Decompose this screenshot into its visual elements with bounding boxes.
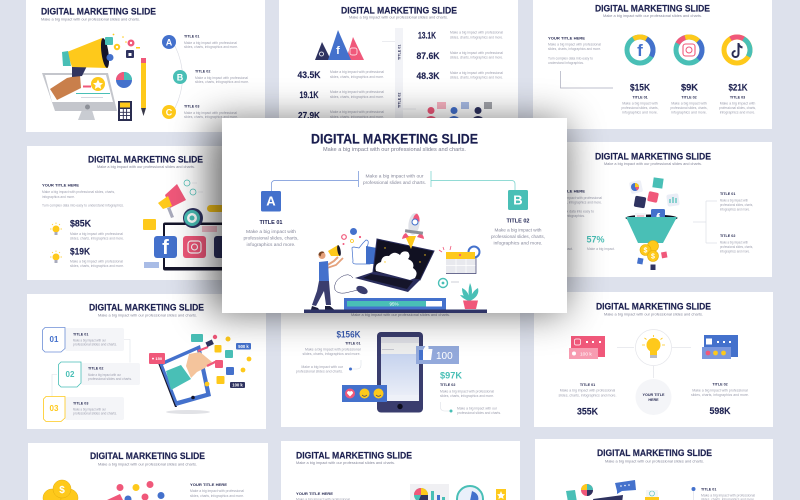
icon: floating social icons [105, 34, 140, 61]
icon: light bulb [50, 250, 62, 263]
text: title 02: professional slides, charts, [720, 245, 753, 249]
callout: left note [296, 360, 361, 374]
subheading: Make a big impact with our professional slides and charts. [351, 313, 450, 317]
statistic: $21K: $21K [728, 82, 748, 92]
statistic: 27.9K: 27.9K [298, 110, 320, 120]
statistic: $156K: TITLE 01 [345, 342, 360, 346]
statistic: 13.1K [418, 30, 503, 40]
badge B with title 02: B [513, 192, 523, 208]
icon: instagram social card [569, 336, 605, 359]
text block: Make a big impact with professional slides, charts, [42, 190, 115, 194]
donut: facebook: f [637, 41, 643, 60]
badge B with title 02: Make a big impact with [494, 228, 542, 232]
subheading: Make a big impact with our professional slides and charts. [349, 16, 448, 20]
badge A with title 01: professional slides, charts, [244, 236, 298, 240]
text block: understand infographics. [548, 214, 585, 218]
illustration: funnel with social icons and coins [626, 177, 680, 270]
text block: Turn complex data into easy to understand infographics. [42, 204, 124, 208]
statistic: $19K: Make a big impact with professional [70, 260, 123, 264]
statistic: 19.1K: Make a big impact with professional [330, 90, 384, 94]
heading: DIGITAL MARKETING SLIDE [90, 451, 205, 462]
list connector arc [175, 46, 182, 108]
statistic: $9K: infographics and more. [671, 110, 707, 114]
text block: infographics and more. [42, 195, 75, 199]
statistic: 48.3K: 48.3K [416, 71, 440, 81]
callout: right note [440, 402, 501, 415]
statistic: $15K: infographics and more. [622, 110, 658, 114]
list item B: TITLE 02 [195, 70, 210, 74]
statistic: 57% [545, 234, 615, 251]
statistic: 598K: Make a big impact with professional [692, 388, 748, 392]
list item A: TITLE 01 [184, 34, 199, 38]
statistic: 13.1K: slides, charts, infographics and more. [450, 36, 503, 40]
callout: like count: 100 [436, 351, 453, 362]
list item C: Make a big impact with professional [184, 111, 237, 115]
list item B [173, 70, 249, 84]
statistic: $97K: Make a big impact with professional [440, 390, 494, 394]
slide: marketing funnel [533, 142, 772, 277]
illustration: laptop and chat icons [566, 480, 659, 500]
statistic: $21K: Make a big impact with [720, 102, 755, 106]
heading: DIGITAL MARKETING SLIDE [296, 450, 412, 462]
icon: social triangles: f [336, 45, 340, 57]
icon: people with chat bubbles [425, 102, 492, 122]
text block [42, 184, 124, 208]
subheading: Make a big impact with our professional slides and charts. [323, 147, 466, 153]
connector: teal [431, 171, 515, 190]
statistic: $21K: infographics and more. [720, 110, 755, 114]
text: title 01: infographics and more. [720, 208, 750, 212]
statistic: $85K: Make a big impact with professional [70, 232, 123, 236]
text: title 02: Make a big impact with [720, 240, 748, 244]
slide: charts and globe [281, 441, 520, 500]
text block: slides, charts, infographics and more. [548, 200, 602, 204]
list item B: B [177, 72, 184, 82]
heading: DIGITAL MARKETING SLIDE [311, 132, 478, 146]
statistic: $97K: $97K [440, 370, 462, 382]
text block: YOUR TITLE HERE [548, 190, 586, 194]
callout: left note: Make a big impact with our [301, 365, 344, 369]
text: title 01 [720, 192, 753, 212]
list item 03: professional slides and charts. [73, 412, 117, 416]
heading: DIGITAL MARKETING SLIDE [341, 6, 457, 16]
list item C [162, 104, 238, 119]
center title circle: YOUR TITLE [643, 393, 665, 397]
subheading: Make a big impact with our professional slides and charts. [98, 314, 197, 318]
icon: coins: $ [59, 485, 65, 496]
list item C: slides, charts, infographics and more. [184, 115, 238, 119]
list item 02: professional slides and charts. [88, 377, 132, 381]
statistic: $21K: professional slides, charts, [719, 106, 756, 110]
statistic: $97K [440, 370, 494, 398]
icon: instagram social card: 100 k [580, 352, 592, 358]
callout: reactions [342, 385, 387, 402]
icon: social triangles [315, 30, 364, 60]
list item 01: TITLE 01 [73, 332, 88, 336]
statistic: 48.3K: Make a big impact with professional [450, 71, 503, 75]
list item 03: Make a big impact with our [73, 408, 107, 412]
heading: DIGITAL MARKETING SLIDE [88, 154, 203, 166]
illustration: progress bar [344, 298, 446, 310]
illustration: funnel with social icons and coins: $ [644, 248, 648, 254]
vertical title band: TITLE 02 [398, 93, 402, 108]
list item A: slides, charts, infographics and more. [184, 45, 238, 49]
statistic: 19.1K: 19.1K [300, 90, 319, 100]
icon: megaphone [62, 38, 111, 77]
text block [190, 483, 244, 498]
slide: numbered list with tablet [27, 294, 266, 429]
statistic: $15K: Make a big impact with [622, 102, 658, 106]
illustration: laptop with rocket launch [355, 212, 434, 292]
statistic: 87.6K: 87.6K [416, 51, 440, 61]
text block: slides, charts, infographics and more. [190, 494, 244, 498]
statistic: $15K [622, 82, 659, 114]
badge B with title 02: TITLE 02 [506, 218, 530, 224]
text block: Turn complex data into easy to [548, 56, 593, 60]
slide: laptop with social apps and bulbs [27, 146, 265, 280]
text: title 02: TITLE 02 [720, 234, 735, 238]
illustration: tablet with hand: 100 k [232, 382, 243, 388]
illustration: calendar and gear [439, 246, 480, 274]
subheading: Make a big impact with our professional slides and charts. [605, 460, 704, 464]
heading: DIGITAL MARKETING SLIDE [596, 302, 711, 312]
text block [548, 36, 601, 65]
statistic: 48.3K [416, 71, 503, 81]
statistic: 598K [691, 382, 749, 416]
heading: DIGITAL MARKETING SLIDE [41, 6, 156, 18]
statistic: 57%: Make a big impact. [587, 247, 615, 251]
illustration: funnel with social icons and coins: f [656, 211, 661, 225]
slide: light bulb hub [534, 292, 773, 427]
subheading: Make a big impact with our professional slides and charts. [97, 165, 195, 169]
illustration: ground [304, 310, 487, 313]
statistic: 598K: 598K [710, 406, 731, 416]
icon: smartphone [377, 332, 423, 412]
slide: coins and megaphone [28, 443, 268, 500]
callout: right note: Make a big impact with our [457, 406, 498, 410]
vertical title band [382, 28, 416, 120]
icon: pencil [141, 58, 146, 116]
list item C: TITLE 03 [184, 104, 199, 108]
text block [296, 492, 350, 500]
statistic: $19K: $19K [70, 246, 90, 256]
list item 01 [42, 328, 124, 352]
slide: three donut charts [533, 0, 772, 129]
slide: megaphone with A B C list [26, 0, 265, 132]
list item 02 [58, 362, 140, 387]
list item A: Make a big impact with professional [184, 41, 237, 45]
statistic: $85K [70, 218, 124, 240]
list item C: C [166, 108, 173, 118]
heading: DIGITAL MARKETING SLIDE [597, 448, 712, 459]
badge A with title 01: TITLE 01 [260, 220, 282, 226]
text block: YOUR TITLE HERE [296, 492, 334, 496]
text block: Turn complex data into easy to [548, 210, 594, 214]
badge A with title 01: Make a big impact with [246, 229, 297, 234]
statistic: $15K: professional slides, charts, [622, 106, 659, 110]
list item 03 [44, 396, 124, 422]
statistic: $15K: TITLE 01 [632, 96, 648, 100]
statistic: 355K: Make a big impact with professional [560, 388, 615, 392]
illustration: funnel with social icons and coins: $ [651, 254, 655, 260]
statistic: $19K: slides, charts, infographics and more. [70, 264, 124, 268]
timeline item: title 01: TITLE 01 [701, 488, 716, 492]
vertical title band: TITLE 01 [398, 45, 402, 60]
list item 01: Make a big impact with our [73, 338, 107, 342]
statistic: $9K: professional slides, charts, [670, 106, 708, 110]
illustration: laptop with social icons: f [162, 237, 169, 259]
text block: Make a big impact with professional [190, 489, 244, 493]
statistic: $85K: $85K [70, 218, 91, 228]
statistic: 27.9K: Make a big impact with professional [330, 110, 384, 114]
statistic: 598K: TITLE 02 [712, 382, 728, 386]
list item A: A [166, 38, 173, 48]
illustration: tablet with hand [149, 334, 251, 414]
statistic: $15K: $15K [630, 82, 650, 92]
icon: coins [43, 480, 78, 500]
badge B with title 02 [491, 190, 545, 246]
statistic: $97K: TITLE 02 [440, 383, 455, 387]
statistic: 355K [559, 383, 617, 416]
icon: social hearts and megaphone [107, 481, 164, 500]
icon: calculator [118, 101, 132, 121]
timeline item: title 01 [692, 487, 755, 500]
heading: DIGITAL MARKETING SLIDE [595, 152, 711, 162]
list item 02: TITLE 02 [88, 366, 103, 370]
text: center note: Make a big impact with our [366, 174, 424, 178]
statistic: 43.5K: slides, charts, infographics and more. [330, 75, 384, 79]
badge A with title 01 [244, 191, 298, 247]
subheading: Make a big impact with our professional slides and charts. [98, 462, 197, 466]
statistic: 57%: Make a big impact. [545, 247, 573, 251]
pie chart [116, 72, 132, 88]
statistic: 355K: slides, charts, infographics and more. [559, 394, 617, 398]
icon: computer monitor [42, 73, 117, 120]
text: title 01: Make a big impact with [720, 198, 748, 202]
statistic: 19.1K [300, 90, 384, 100]
badge B with title 02: professional slides, charts, [491, 234, 545, 239]
statistic: 87.6K: slides, charts, infographics and more. [450, 56, 503, 60]
statistic: 27.9K [298, 110, 384, 120]
illustration: tablet with hand: ♥ 150 [152, 356, 163, 361]
badge B with title 02: infographics and more. [494, 240, 542, 246]
text: center note [363, 174, 426, 185]
list item 02: Make a big impact with our [88, 373, 122, 377]
statistic: $156K: $156K [336, 330, 361, 340]
illustration: laptop with social icons [143, 180, 237, 270]
icon: light bulb hub [636, 330, 672, 366]
statistic: 13.1K: 13.1K [418, 30, 436, 40]
heading: DIGITAL MARKETING SLIDE [89, 302, 204, 314]
text: center note: professional slides and charts. [363, 180, 426, 185]
illustration: mouse and cable [335, 275, 369, 296]
donut: tiktok [719, 32, 755, 68]
statistic: 355K: 355K [577, 406, 598, 416]
central slide [222, 118, 567, 313]
subheading: Make a big impact with our professional slides and charts. [41, 18, 140, 22]
bracket connector [693, 201, 717, 243]
statistic: $156K: slides, charts, infographics and more. [303, 352, 361, 356]
text: title 02 [720, 234, 753, 254]
statistic: $21K: TITLE 03 [730, 96, 745, 100]
slide: social triangles and statistics [279, 0, 518, 123]
statistic: $156K [303, 330, 361, 356]
center title circle: HERE [648, 398, 659, 402]
statistic: $9K: TITLE 02 [681, 96, 697, 100]
illustration: progress bar: 95% [389, 302, 399, 307]
illustration: tablet with hand: 500 k [238, 344, 249, 349]
statistic: $85K: slides, charts, infographics and more. [70, 236, 124, 240]
text block: understand infographics. [548, 61, 584, 65]
statistic: 43.5K: 43.5K [298, 70, 321, 80]
list item 01: 01 [50, 335, 59, 344]
callout: right note: professional slides and charts. [457, 411, 501, 415]
subheading: Make a big impact with our professional slides and charts. [604, 162, 702, 166]
donut: instagram [671, 32, 707, 68]
statistic: $97K: slides, charts, infographics and more. [440, 394, 494, 398]
subheading: Make a big impact with our professional slides and charts. [296, 461, 395, 465]
list item A [162, 34, 238, 49]
center title circle [636, 379, 672, 415]
list item 01: professional slides and charts. [73, 342, 117, 346]
statistic: $9K [670, 82, 708, 114]
badge A with title 01: infographics and more. [246, 242, 296, 247]
statistic: 87.6K [416, 51, 503, 61]
list item 02: 02 [66, 370, 75, 379]
text block: Make a big impact with professional [548, 196, 602, 200]
text: title 02: infographics and more. [720, 250, 750, 254]
text block: Make a big impact with professional [548, 42, 601, 46]
icon: thumbs up [352, 240, 377, 264]
subheading: Make a big impact with our professional slides and charts. [604, 312, 703, 316]
icon: facebook social card [702, 335, 738, 359]
statistic: $21K [719, 82, 756, 114]
text block: YOUR TITLE HERE [548, 36, 586, 40]
statistic: $19K [70, 246, 124, 268]
donut: facebook [622, 32, 658, 68]
connector: blue [272, 171, 358, 191]
text block: YOUR TITLE HERE [42, 184, 80, 188]
text block: slides, charts, infographics and more. [548, 47, 601, 51]
statistic: $156K: Make a big impact with professional [305, 348, 361, 352]
illustration: chart document [410, 484, 449, 500]
statistic: $9K: $9K [681, 82, 699, 92]
callout: left note: professional slides and charts. [296, 370, 343, 374]
illustration: potted plant [460, 283, 478, 309]
statistic: 355K: TITLE 01 [580, 383, 595, 387]
heading: DIGITAL MARKETING SLIDE [595, 4, 710, 14]
list item 03: 03 [50, 404, 59, 413]
illustration: person with megaphone [311, 245, 343, 310]
list item B: Make a big impact with professional [195, 76, 248, 80]
statistic: 19.1K: slides, charts, infographics and more. [330, 95, 384, 99]
statistic: 87.6K: Make a big impact with professional [450, 51, 503, 55]
text: title 01: professional slides, charts, [720, 203, 753, 207]
illustration: target [438, 278, 459, 288]
list item B: slides, charts, infographics and more. [195, 80, 249, 84]
illustration: floating icons [342, 228, 361, 245]
list item 03: TITLE 03 [73, 402, 88, 406]
central slide drop shadow [210, 122, 565, 312]
icon: light bulb [50, 222, 62, 235]
statistic: 57%: 57% [586, 234, 604, 244]
callout: like count [416, 345, 459, 364]
illustration: globe and star [457, 486, 506, 500]
statistic: 13.1K: Make a big impact with professional [450, 30, 503, 34]
subheading: Make a big impact with our professional slides and charts. [603, 14, 702, 18]
slide: devices and timeline [535, 439, 773, 500]
slide: phone with likes [281, 305, 520, 427]
text: title 01: TITLE 01 [720, 192, 735, 196]
statistic: 27.9K: slides, charts, infographics and more. [330, 115, 384, 119]
statistic: 43.5K [298, 70, 384, 80]
statistic: 43.5K: Make a big impact with professional [330, 70, 384, 74]
timeline item: title 01: Make a big impact with professional [701, 494, 755, 498]
statistic: $9K: Make a big impact with [671, 102, 707, 106]
text block [548, 190, 602, 218]
statistic: 48.3K: slides, charts, infographics and more. [450, 76, 503, 80]
text block: YOUR TITLE HERE [190, 483, 228, 487]
statistic: 598K: slides, charts, infographics and more. [691, 393, 749, 397]
badge A with title 01: A [266, 194, 276, 208]
